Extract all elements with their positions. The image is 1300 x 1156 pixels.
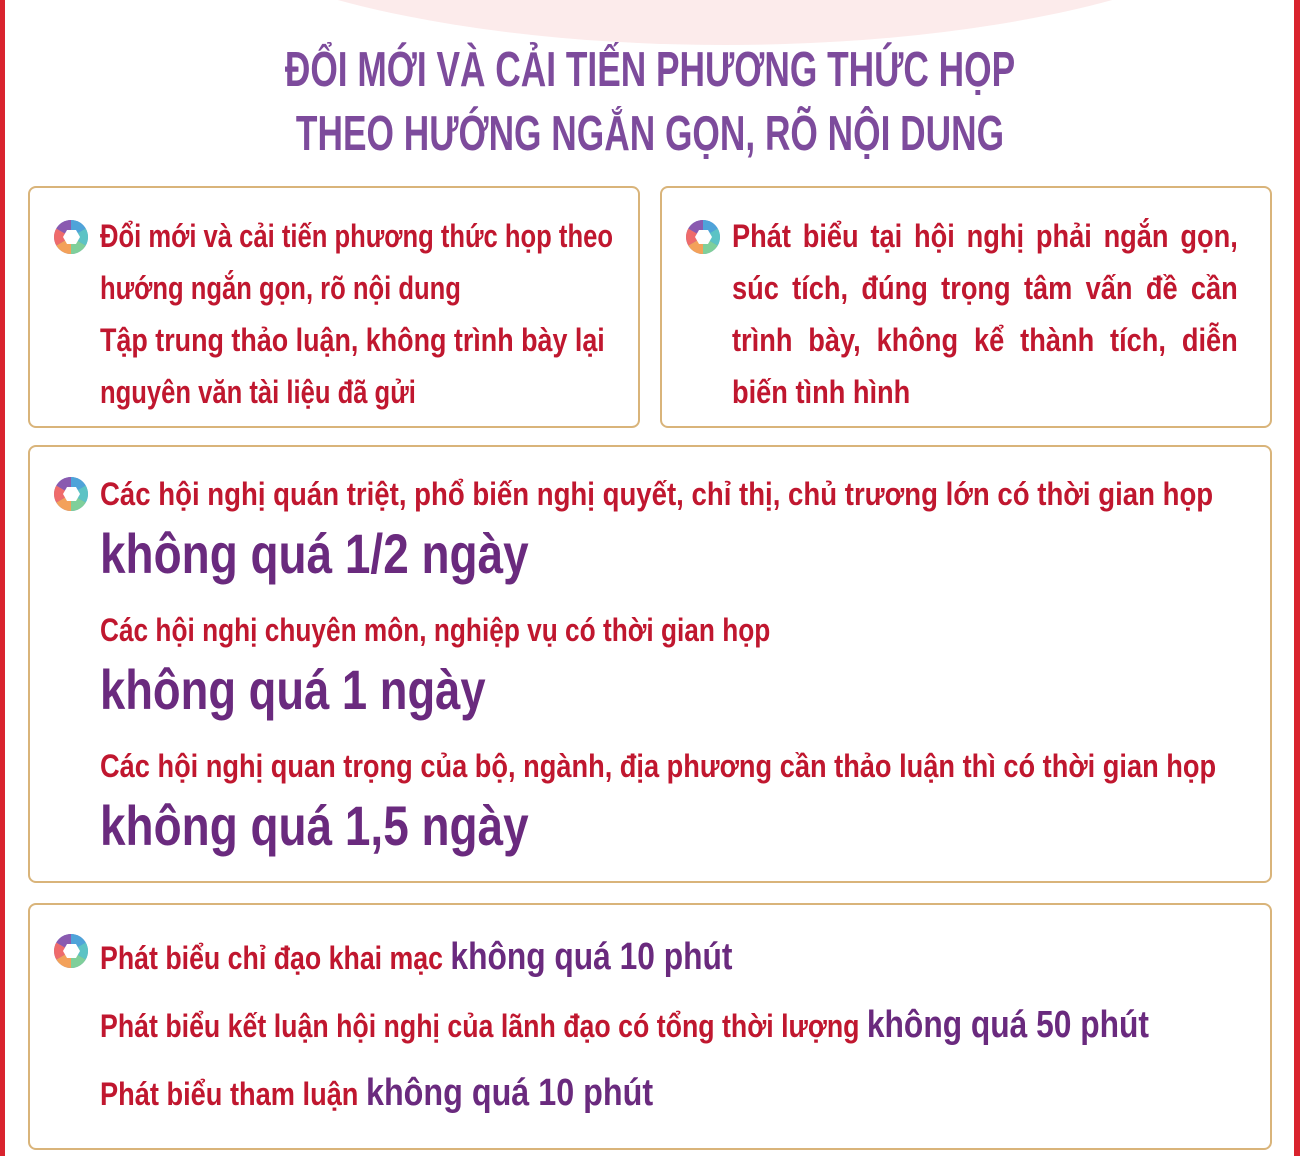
red frame right (1294, 0, 1300, 1156)
icon: aperture (686, 220, 720, 254)
panel: box 3: Các hội nghị chuyên môn, nghiệp vụ có thời gian họp (100, 612, 770, 648)
panel: box 2: trình bày, không kể thành tích, diễn (732, 322, 1238, 358)
title: THEO HƯỚNG NGẮN GỌN, RÕ NỘI DUNG (296, 107, 1004, 161)
panel: box 4 (28, 903, 1272, 1150)
title: ĐỔI MỚI VÀ CẢI TIẾN PHƯƠNG THỨC HỌP (285, 43, 1015, 97)
panel: box 2: biến tình hình (732, 374, 910, 410)
panel: box 1: nguyên văn tài liệu đã gửi (100, 374, 416, 410)
panel: box 1: Tập trung thảo luận, không trình bày lại (100, 322, 605, 358)
panel: box 1 (28, 186, 640, 428)
text: Các hội nghị quán triệt, phổ biến nghị quyết, chỉ thị, chủ trương lớn có thời gian họp (100, 476, 1213, 512)
panel: box 3: Các hội nghị quan trọng của bộ, ngành, địa phương cần thảo luận thì có thời gian họp (100, 748, 1216, 784)
panel: box 3: không quá 1,5 ngày (100, 794, 529, 857)
panel: box 2 (660, 186, 1272, 428)
panel: box 3: không quá 1 ngày (100, 658, 486, 721)
panel: box 2: súc tích, đúng trọng tâm vấn đề cần (732, 270, 1238, 306)
text: Phát biểu chỉ đạo khai mạc không quá 10 phút (100, 936, 732, 978)
panel: box 1: hướng ngắn gọn, rõ nội dung (100, 270, 461, 306)
panel: box 4: Phát biểu kết luận hội nghị của lãnh đạo có tổng thời lượng không quá 50 phút (100, 1004, 1149, 1046)
red frame left (0, 0, 5, 1156)
icon: aperture (54, 477, 88, 511)
icon: aperture (54, 220, 88, 254)
panel: box 3: không quá 1/2 ngày (100, 522, 529, 585)
panel: box 3 (28, 445, 1272, 883)
decorative top arc (150, 0, 1300, 45)
text: Phát biểu tại hội nghị phải ngắn gọn, (732, 218, 1238, 254)
icon: aperture (54, 934, 88, 968)
panel: box 4: Phát biểu tham luận không quá 10 phút (100, 1072, 653, 1114)
text: Đổi mới và cải tiến phương thức họp theo (100, 218, 613, 254)
title (285, 42, 1015, 161)
